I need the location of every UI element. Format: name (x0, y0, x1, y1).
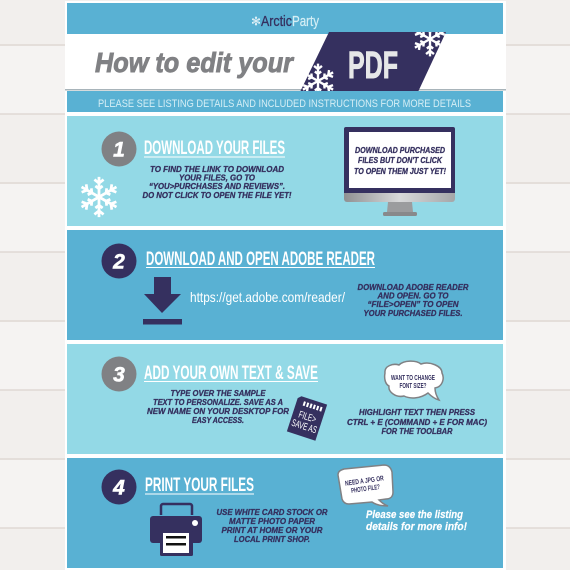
toolbar instructions: CTRL + E (COMMAND + E FOR MAC) (347, 417, 487, 427)
speech bubble: font size: WANT TO CHANGE (391, 375, 435, 382)
logo: Arctic Party (252, 13, 319, 30)
icon: monitor (344, 127, 455, 216)
instructions text: MATTE PHOTO PAPER (229, 516, 316, 526)
step number 1 (102, 132, 136, 166)
header banner (67, 3, 503, 34)
heading: add your own text and save: ADD YOUR OWN TEXT & SAVE (144, 363, 318, 384)
monitor text: TO OPEN THEM JUST YET! (354, 166, 446, 176)
panel: step 4 (67, 458, 503, 568)
instructions text: YOUR FILES, GO TO (179, 172, 255, 182)
step number 2 (102, 244, 136, 278)
icon: SD card (287, 395, 327, 441)
logo: Arctic Party: Party (292, 13, 319, 30)
speech bubble: font size (385, 361, 443, 400)
toolbar instructions: HIGHLIGHT TEXT THEN PRESS (359, 407, 475, 417)
icon: SD card: FILE> (297, 410, 318, 426)
listing note (366, 509, 467, 533)
instructions text: TYPE OVER THE SAMPLE (170, 388, 266, 398)
monitor text: DOWNLOAD PURCHASED (355, 145, 445, 155)
speech bubble: jpg or photo file: PHOTO FILE? (351, 484, 380, 495)
step number 2: 2 (112, 250, 125, 274)
instructions text: DO NOT CLICK TO OPEN THE FILE YET! (142, 190, 292, 200)
toolbar instructions: FOR THE TOOLBAR (382, 426, 453, 436)
panel: step 3 (67, 344, 503, 454)
speech bubble: jpg or photo file: NEED A JPG OR (345, 475, 384, 488)
instructions text: PRINT AT HOME OR YOUR (222, 525, 323, 535)
instructions text (142, 164, 292, 200)
instructions text: EASY ACCESS. (192, 415, 244, 425)
icon: snowflake (79, 177, 119, 217)
instructions text: USE WHITE CARD STOCK OR (216, 507, 328, 517)
instructions text: TEXT TO PERSONALIZE. SAVE AS A (153, 397, 283, 407)
speech bubble: font size: FONT SIZE? (400, 383, 426, 390)
PDF badge (300, 32, 446, 91)
subtitle bar: PLEASE SEE LISTING DETAILS AND INCLUDED INSTRUCTIONS FOR MORE DETAILS (98, 98, 471, 110)
subtitle bar (67, 91, 503, 112)
panel: step 1 (67, 116, 503, 226)
instructions text: AND OPEN. GO TO (377, 290, 449, 300)
step number 3: 3 (113, 364, 125, 386)
title band (65, 32, 506, 91)
instructions text: DOWNLOAD ADOBE READER (358, 282, 469, 292)
instructions text: NEW NAME ON YOUR DESKTOP FOR (147, 406, 290, 416)
heading: print your files (145, 475, 254, 496)
instructions text: “FILE>OPEN” TO OPEN (368, 299, 459, 309)
heading: download your files: DOWNLOAD YOUR FILES (144, 138, 285, 159)
link: adobe reader url: https://get.adobe.com/reader/ (190, 289, 345, 305)
listing note: Please see the listing (366, 509, 463, 521)
instructions text (358, 282, 469, 318)
icon: download arrow (143, 277, 182, 324)
heading: print your files: PRINT YOUR FILES (145, 475, 254, 496)
instructions text: LOCAL PRINT SHOP. (234, 534, 310, 544)
title: How to edit your: How to edit your (95, 47, 295, 78)
speech bubble: jpg or photo file (338, 465, 393, 506)
step number 3 (102, 356, 136, 392)
instructions text: TO FIND THE LINK TO DOWNLOAD (150, 164, 284, 174)
monitor text: FILES BUT DON'T CLICK (358, 155, 443, 165)
icon: SD card: SAVE AS (290, 418, 318, 436)
instructions text: YOUR PURCHASED FILES. (364, 308, 462, 318)
instructions text (147, 388, 290, 425)
step number 1: 1 (113, 138, 125, 162)
toolbar instructions (347, 407, 487, 436)
step number 4: 4 (112, 476, 125, 500)
logo: Arctic Party: Arctic (261, 13, 292, 30)
PDF badge: PDF (348, 45, 398, 87)
instructions text (216, 507, 328, 544)
white page sheet (65, 1, 506, 570)
icon: printer (150, 504, 202, 556)
monitor text (354, 145, 446, 176)
instructions text: “YOU>PURCHASES AND REVIEWS”. (149, 181, 285, 191)
step number 4 (102, 470, 136, 504)
heading: download and open adobe reader: DOWNLOAD AND OPEN ADOBE READER (146, 249, 375, 270)
panel: step 2 (67, 230, 503, 340)
listing note: details for more info! (366, 521, 467, 533)
